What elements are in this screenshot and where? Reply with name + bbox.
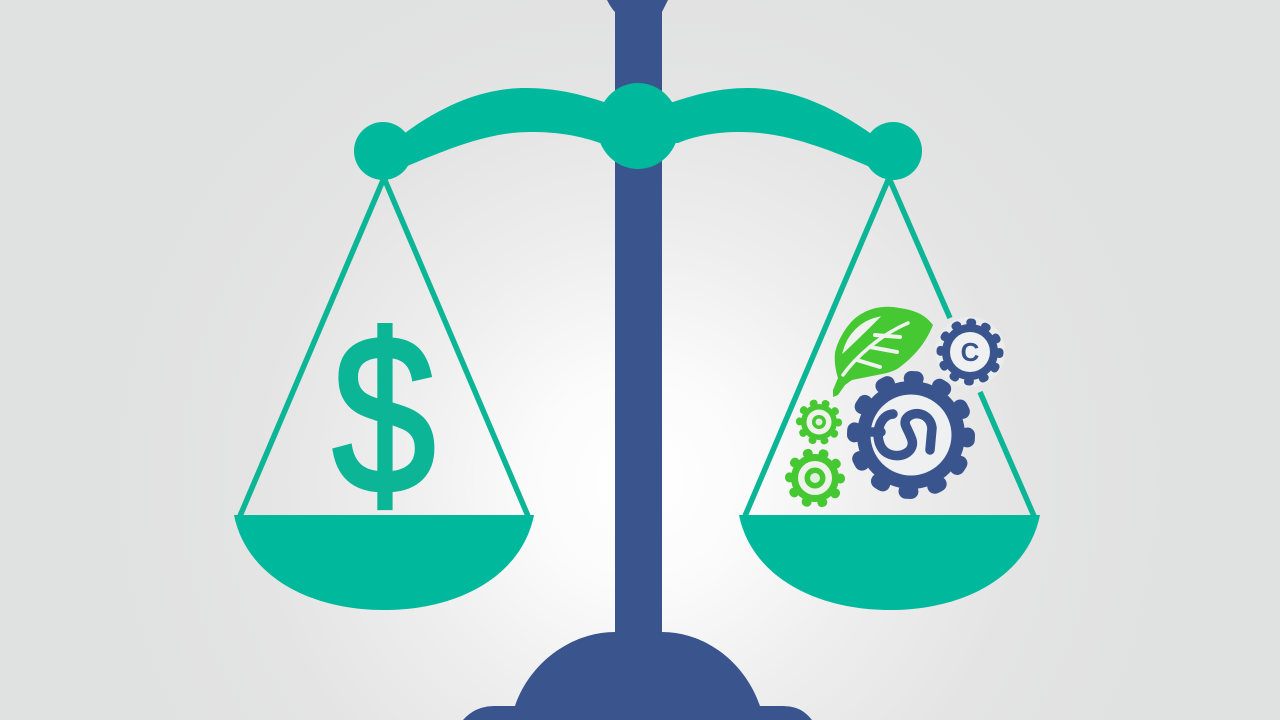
right pan <box>739 515 1040 610</box>
icon: leaf <box>833 307 933 397</box>
beam hub <box>597 83 679 169</box>
icon: upper green gear <box>800 402 838 442</box>
base <box>463 632 812 720</box>
icon: small blue gear <box>935 317 1005 387</box>
left pan <box>234 515 534 610</box>
left pan strings <box>240 178 528 516</box>
central post <box>607 0 668 640</box>
icon: lower green gear <box>790 452 840 504</box>
beam <box>354 83 922 180</box>
icon: large blue gear <box>854 378 968 492</box>
dollar sign: $ <box>333 289 435 540</box>
left beam end <box>354 122 412 180</box>
icon: small blue gear: C <box>961 337 980 367</box>
right pan strings <box>745 178 1034 516</box>
right beam end <box>864 122 922 180</box>
